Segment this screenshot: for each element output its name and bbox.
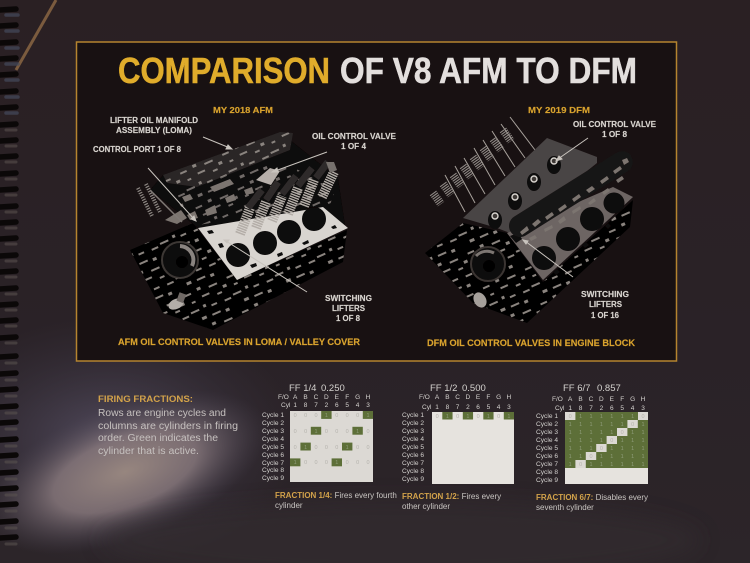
heading: MY 2019 DFM: MY 2019 DFM (528, 105, 590, 115)
valley (165, 179, 254, 224)
chart: FF 1/2 firing table: 1111 (446, 414, 510, 420)
text block: firing fractions: order. Green indicates the (98, 433, 218, 444)
cylinder head (463, 138, 597, 233)
caption: fraction 1/2 (402, 492, 501, 511)
chart: FF 6/7 firing table: ABCDEFGH (568, 396, 646, 403)
text block: firing fractions: Rows are engine cycles and (98, 408, 226, 419)
oil plug (471, 290, 489, 310)
label: switching lifters 1 of 8: LIFTERS (332, 304, 366, 313)
lifter valley clutter (520, 162, 622, 226)
chart: FF 6/7 firing table: 1111111 (569, 438, 645, 444)
title: OF V8 AFM TO DFM (340, 50, 637, 91)
chart: FF 1/2 firing table: Cycle 8 (402, 468, 424, 475)
crank pulley (471, 247, 505, 281)
chart: FF 6/7 firing table: 1111111 (569, 446, 645, 452)
deck gasket (198, 207, 348, 280)
heading: MY 2018 AFM: MY 2018 AFM (213, 105, 273, 115)
chart: FF 1/4 firing table: ABCDEFGH (293, 394, 371, 401)
chart: FF 6/7 firing table: 1111111 (569, 430, 645, 436)
chart: FF 6/7 firing table: 0 (579, 462, 582, 468)
chart: FF 6/7 firing table: Cycle 2 (536, 421, 558, 428)
chart: FF 1/2 firing table: 0000 (436, 414, 500, 420)
spiral binding (0, 9, 18, 544)
crank pulley (162, 242, 198, 278)
chart: FF 6/7 firing table: Cycle 1 (536, 413, 558, 420)
chart: FF 1/4 firing table: Cycle 2 (262, 420, 284, 427)
chart: FF 6/7 firing table: 0 (631, 422, 634, 428)
arrows: DFM leader lines (523, 138, 588, 277)
chart: FF 6/7 firing table: 1111111 (569, 462, 645, 468)
chart: FF 6/7 firing table (536, 383, 648, 484)
oil control valves (488, 156, 561, 229)
chart: FF 1/4 firing table: Cycle 8 (262, 467, 284, 474)
valve springs (240, 172, 334, 234)
chart: FF 6/7 firing table: 00 (569, 414, 645, 420)
chart: FF 1/4 firing table (262, 383, 373, 482)
rear springs (138, 184, 160, 216)
text block: firing fractions: columns are cylinders in firing (98, 421, 238, 432)
label: lifter oil manifold assembly (110, 116, 198, 135)
valve springs (433, 130, 511, 204)
deck gasket (507, 187, 633, 280)
chart: FF 1/4 firing table: Cycle 9 (262, 475, 284, 482)
chart: FF 1/4 firing table: 11 (304, 445, 349, 451)
chart: FF 1/2 firing table: Cycle 9 (402, 476, 424, 483)
caption: fraction 1/2: other cylinder (402, 502, 450, 511)
caption: fraction 1/4: FRACTION 1/4: Fires every fourth (275, 491, 397, 500)
chart: FF 1/4 firing table: 11 (325, 413, 370, 419)
label: control port: CONTROL PORT 1 OF 8 (93, 145, 182, 154)
chart: FF 1/4 firing table: Cycle 7 (262, 460, 284, 467)
label: switching lifters 1 of 16: SWITCHING (581, 290, 629, 299)
chart: FF 6/7 firing table: Cycle 7 (536, 461, 558, 468)
chart: FF 6/7 firing table: Cycle 5 (536, 445, 558, 452)
chart: FF 6/7 firing table: 0 (610, 438, 613, 444)
chart: FF 1/2 firing table: ABCDEFGH (435, 394, 512, 401)
chart: FF 6/7 firing table: 0 (600, 446, 603, 452)
label: oil control valve 1 of 8 (573, 120, 657, 139)
engine illustration: MY 2018 AFM (130, 132, 348, 330)
chart: FF 6/7 firing table: 0.857 (597, 383, 621, 394)
title (118, 50, 637, 91)
chart: FF 6/7 firing table: Cyl (555, 405, 565, 412)
chart: FF 6/7 firing table: 0 (589, 454, 593, 460)
chart: FF 1/4 firing table: Cycle 1 (262, 412, 284, 419)
label: switching lifters 1 of 16: LIFTERS (589, 300, 623, 309)
chart: FF 1/4 firing table: 11 (314, 429, 359, 435)
caption: fraction 6/7 (536, 493, 648, 512)
chart: FF 6/7 firing table: 0 (621, 430, 624, 436)
label: switching lifters 1 of 16: 1 OF 16 (591, 311, 620, 320)
arrows: AFM leader lines (148, 137, 327, 292)
chart: FF 1/4 firing table: Cycle 4 (262, 436, 284, 443)
chart: FF 6/7 firing table: Cycle 6 (536, 453, 558, 460)
caption: fraction 6/7: seventh cylinder (536, 503, 594, 512)
engine illustration: MY 2019 DFM (425, 117, 633, 323)
block (130, 223, 347, 330)
chart: FF 6/7 firing table: 1111111 (569, 454, 645, 460)
chart: FF 6/7 firing table: Cycle 9 (536, 477, 558, 484)
panel: engine comparison (76, 42, 676, 361)
label: switching lifters 1 of 16 (581, 290, 629, 320)
valve rods (445, 117, 535, 212)
caption: AFM: AFM OIL CONTROL VALVES IN LOMA / VALLEY COVER (118, 337, 360, 348)
caption: DFM: DFM OIL CONTROL VALVES IN ENGINE BLOCK (427, 338, 635, 349)
chart: FF 1/2 firing table: Cycle 4 (402, 436, 424, 443)
label: oil control valve 1 of 4: 1 OF 4 (341, 142, 367, 151)
chart: FF 1/4 firing table: 000000 (304, 460, 370, 466)
chart: FF 6/7 firing table: 111111 (579, 414, 634, 420)
chart: FF 1/2 firing table: F/O (419, 394, 430, 401)
chart: FF 1/4 firing table: Cyl (281, 402, 291, 409)
chart: FF 1/2 firing table: Cycle 5 (402, 444, 424, 451)
label: switching lifters 1 of 8: 1 OF 8 (336, 314, 361, 323)
chart: FF 1/2 firing table: Cyl (422, 404, 432, 411)
text block: firing fractions: FIRING FRACTIONS: (98, 394, 193, 405)
caption: fraction 6/7: FRACTION 6/7: Disables every (536, 493, 648, 502)
chart: FF 6/7 firing table: F/O (552, 396, 563, 403)
chart: FF 1/2 firing table: Cycle 2 (402, 420, 424, 427)
chart: FF 6/7 firing table: Cycle 4 (536, 437, 558, 444)
label: lifter oil manifold assembly: ASSEMBLY (LOMA) (116, 126, 192, 135)
chart: FF 1/2 firing table: Cycle 6 (402, 452, 424, 459)
caption: fraction 1/2: FRACTION 1/2: Fires every (402, 492, 501, 501)
text block: firing fractions: cylinder that is active. (98, 446, 199, 457)
chart: FF 1/2 firing table: Cycle 3 (402, 428, 424, 435)
chart: FF 1/4 firing table: 0.250 (321, 383, 345, 394)
chart: FF 1/4 firing table: 18726543 (293, 402, 370, 409)
label: oil control valve 1 of 4 (312, 132, 397, 151)
chart: FF 6/7 firing table: Cycle 3 (536, 429, 558, 436)
edge of next page: tan diagonal line (16, 0, 56, 70)
chart: FF 6/7 firing table: FF 6/7 (563, 383, 590, 394)
chart: FF 1/4 firing table: 11 (294, 460, 338, 466)
title: COMPARISON (118, 50, 330, 91)
chart: FF 1/2 firing table: FF 1/2 (430, 383, 457, 394)
label: oil control valve 1 of 4: OIL CONTROL VALVE (312, 132, 397, 141)
chart: FF 6/7 firing table: 18726543 (568, 405, 645, 412)
label: lifter oil manifold assembly: LIFTER OIL MANIFOLD (110, 116, 198, 125)
label: oil control valve 1 of 8: OIL CONTROL VALVE (573, 120, 657, 129)
chart: FF 1/2 firing table: 0.500 (462, 383, 486, 394)
chart: FF 1/4 firing table: Cycle 5 (262, 444, 284, 451)
chart: FF 1/2 firing table (402, 383, 514, 484)
label: switching lifters 1 of 8 (325, 294, 372, 323)
chart: FF 1/4 firing table: 000000 (294, 445, 370, 451)
block (425, 200, 633, 323)
chart: FF 1/2 firing table: 18726543 (435, 404, 511, 411)
chart: FF 1/4 firing table: 000000 (294, 429, 370, 435)
caption: fraction 1/4 (275, 491, 397, 510)
oil plug (167, 296, 185, 312)
chart: FF 6/7 firing table: 1111111 (569, 422, 645, 428)
LOMA manifold (163, 132, 293, 187)
chart: FF 1/2 firing table: Cycle 7 (402, 460, 424, 467)
label: oil control valve 1 of 8: 1 OF 8 (602, 130, 628, 139)
chart: FF 1/2 firing table: Cycle 1 (402, 412, 424, 419)
label: switching lifters 1 of 8: SWITCHING (325, 294, 372, 303)
caption: fraction 1/4: cylinder (275, 501, 303, 510)
text block: firing fractions (98, 394, 238, 457)
chart: FF 1/4 firing table: F/O (278, 394, 289, 401)
chart: FF 1/4 firing table: Cycle 3 (262, 428, 284, 435)
chart: FF 1/4 firing table: FF 1/4 (289, 383, 316, 394)
chart: FF 6/7 firing table: Cycle 8 (536, 469, 558, 476)
chart: FF 1/4 firing table: 000000 (294, 413, 359, 419)
chart: FF 1/4 firing table: Cycle 6 (262, 452, 284, 459)
